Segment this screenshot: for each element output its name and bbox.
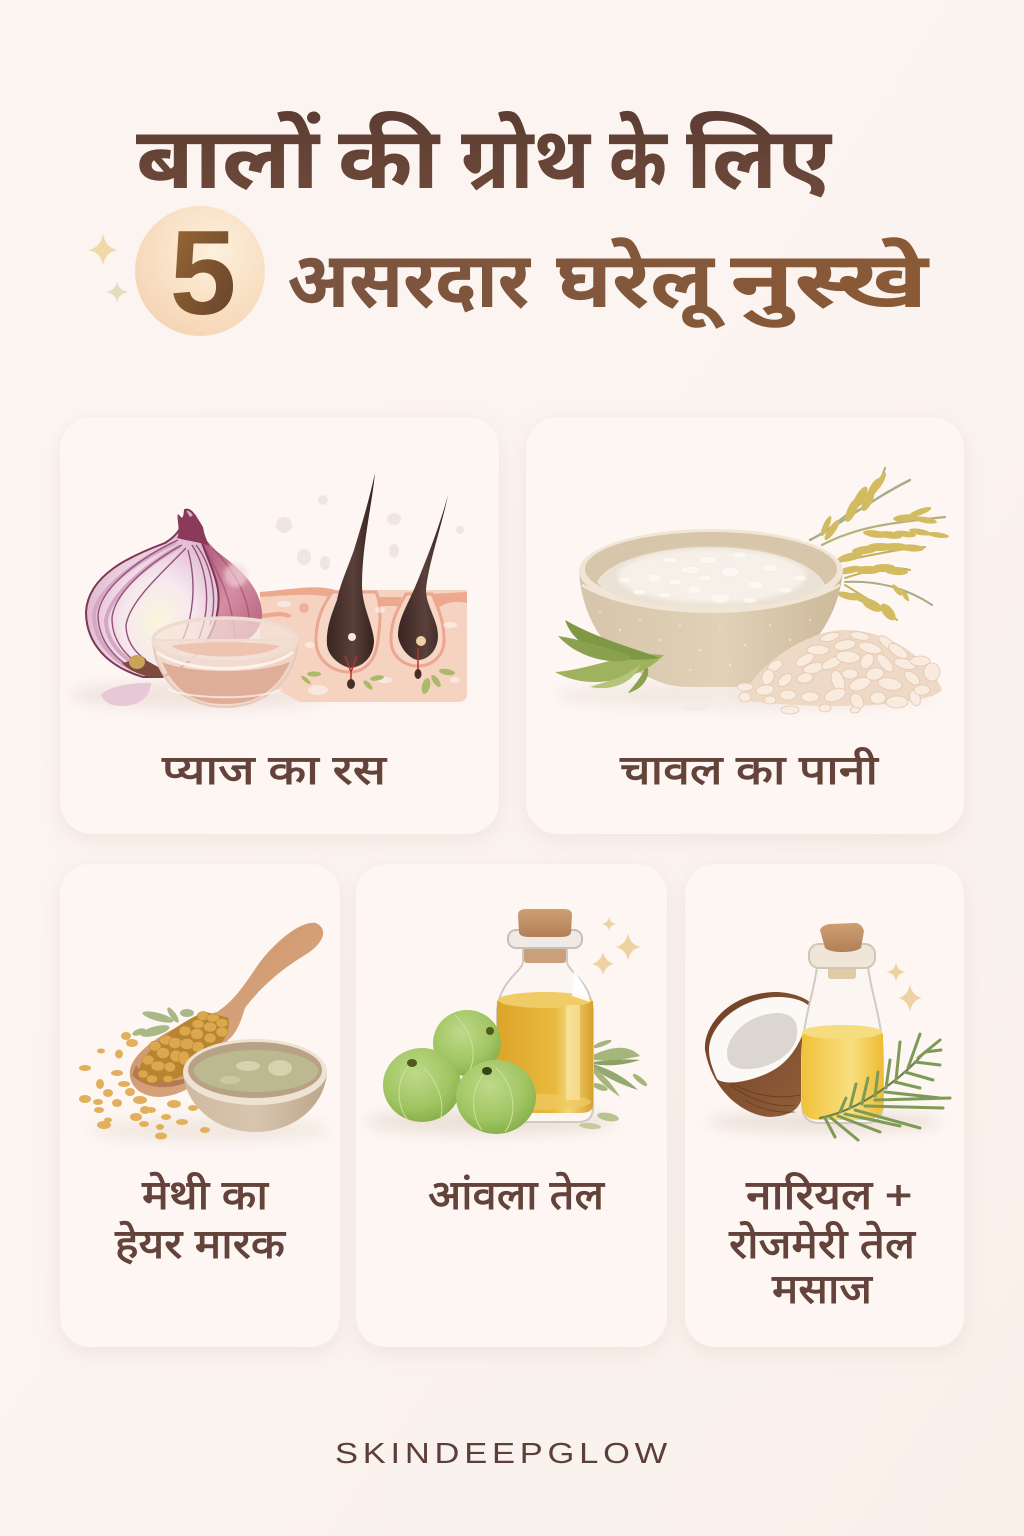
icon: amla fruits <box>383 1010 536 1134</box>
brand name: SKINDEEPGLOW <box>335 1438 672 1470</box>
title line 2: नुस्खे <box>730 236 930 328</box>
icon: oil bottle <box>497 909 593 1122</box>
icon: hair strand large <box>327 473 375 689</box>
icon: hair strand small <box>398 495 448 679</box>
icon: onion <box>86 510 262 678</box>
icon: wooden spoon <box>130 923 323 1097</box>
icon: rice water bowl <box>579 529 843 687</box>
label: coconut rosemary massage: रोजमेरी तेल <box>729 1220 916 1267</box>
label: rice water: चावल का पानी <box>620 747 880 793</box>
panel: amla oil <box>356 864 667 1353</box>
icon: rice stalks <box>810 468 949 623</box>
label: fenugreek hair mask: हेयर मारक <box>115 1220 287 1267</box>
icon: leaves <box>131 1006 194 1039</box>
panel: coconut rosemary massage <box>685 864 964 1353</box>
icon: rosemary sprig <box>820 1034 950 1140</box>
title line 2 <box>287 236 930 329</box>
icon: fenugreek seeds in spoon <box>138 1012 229 1083</box>
sparkle icons <box>88 233 128 303</box>
icon: coconut <box>705 992 812 1117</box>
label: coconut rosemary massage: मसाज <box>772 1266 873 1312</box>
number 5 badge <box>135 206 265 340</box>
title line 1 <box>136 110 833 207</box>
title <box>88 110 930 340</box>
icon: scalp skin <box>260 587 467 702</box>
icon: glass bowl of juice <box>153 618 298 707</box>
label: coconut rosemary massage <box>729 1172 916 1312</box>
title line 2: घरेलू <box>556 236 726 329</box>
icon: sparkles <box>886 962 922 1012</box>
panel: rice water <box>526 417 964 840</box>
icon: green sprig <box>579 1038 649 1130</box>
label: fenugreek hair mask: मेथी का <box>142 1171 270 1218</box>
label: fenugreek hair mask <box>115 1171 287 1267</box>
title line 1: के <box>609 110 668 207</box>
panel: fenugreek hair mask <box>60 864 340 1353</box>
illustration: rice bowl, stalks and grains <box>555 468 949 714</box>
panel: onion juice <box>60 417 499 840</box>
icon: paste bowl <box>183 1039 327 1132</box>
illustration: coconut, oil bottle and rosemary <box>705 923 950 1140</box>
title line 1: बालों <box>136 110 321 207</box>
icon: floating droplets <box>276 495 464 570</box>
label: coconut rosemary massage: नारियल + <box>746 1172 912 1218</box>
title line 2: असरदार <box>287 236 531 324</box>
label: onion juice: प्याज का रस <box>162 747 388 793</box>
icon: small leaves <box>300 668 455 695</box>
title line 1: लिए <box>686 110 833 207</box>
icon: rice pile <box>597 630 942 714</box>
illustration: onion, juice and hair follicles <box>70 473 467 709</box>
title line 1: ग्रोथ <box>461 110 592 207</box>
icon: onion piece <box>101 683 151 706</box>
icon: scattered seeds <box>79 1032 210 1140</box>
illustration: amla and oil bottle <box>365 909 649 1135</box>
number 5 badge: 5 <box>170 206 236 340</box>
title line 1: की <box>338 110 441 207</box>
icon: oil bottle <box>802 923 883 1123</box>
label: amla oil: आंवला तेल <box>428 1171 605 1218</box>
icon: green leaves <box>555 620 664 693</box>
illustration: fenugreek spoon and paste bowl <box>79 923 330 1141</box>
icon: sparkles <box>592 917 641 975</box>
